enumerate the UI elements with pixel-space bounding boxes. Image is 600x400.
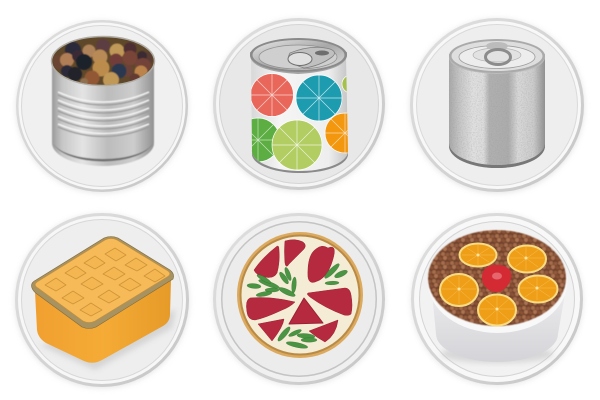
plate 3 bbox=[410, 18, 584, 193]
panel: bowl of grains with orange slices bbox=[411, 213, 583, 386]
pull-tab lid bbox=[250, 38, 347, 74]
lid embossed squares bbox=[45, 248, 165, 316]
lime slice bbox=[272, 120, 322, 170]
red slice bbox=[250, 73, 294, 117]
panel: plain metal can bbox=[410, 18, 584, 193]
olives bbox=[51, 39, 154, 88]
panel: labelled pull-tab can bbox=[213, 18, 385, 191]
panel: orange rectangular tin bbox=[15, 213, 189, 388]
apple bbox=[482, 265, 511, 292]
brushed body bbox=[449, 58, 545, 168]
plate 1 bbox=[16, 20, 188, 193]
panel: pizza bbox=[213, 213, 385, 386]
orange slices bbox=[440, 244, 558, 326]
panel: can of olives bbox=[16, 20, 188, 193]
label body bbox=[251, 59, 348, 173]
teal slice bbox=[296, 75, 342, 121]
slice centres bbox=[458, 254, 538, 310]
green slice bbox=[252, 118, 277, 162]
fruit slice pattern bbox=[251, 73, 348, 170]
ring-pull lid bbox=[449, 39, 545, 74]
can opening rim bbox=[52, 36, 154, 86]
plate 4 bbox=[15, 213, 189, 388]
rosemary sprigs bbox=[247, 262, 348, 350]
slice segments bbox=[442, 245, 556, 324]
can body bbox=[52, 61, 154, 166]
tin lid rim bbox=[32, 236, 174, 328]
tin shadow bbox=[40, 310, 176, 370]
bowl bbox=[428, 229, 568, 363]
grain filling bbox=[428, 230, 566, 326]
tin lid top bbox=[35, 238, 170, 322]
tin body bbox=[35, 280, 171, 363]
plate 6 bbox=[411, 213, 583, 386]
orange slice bbox=[324, 112, 348, 154]
plate 2 bbox=[213, 18, 385, 191]
crust and cheese bbox=[237, 232, 363, 358]
plate 5 bbox=[213, 213, 385, 386]
meat slices bbox=[246, 240, 352, 342]
